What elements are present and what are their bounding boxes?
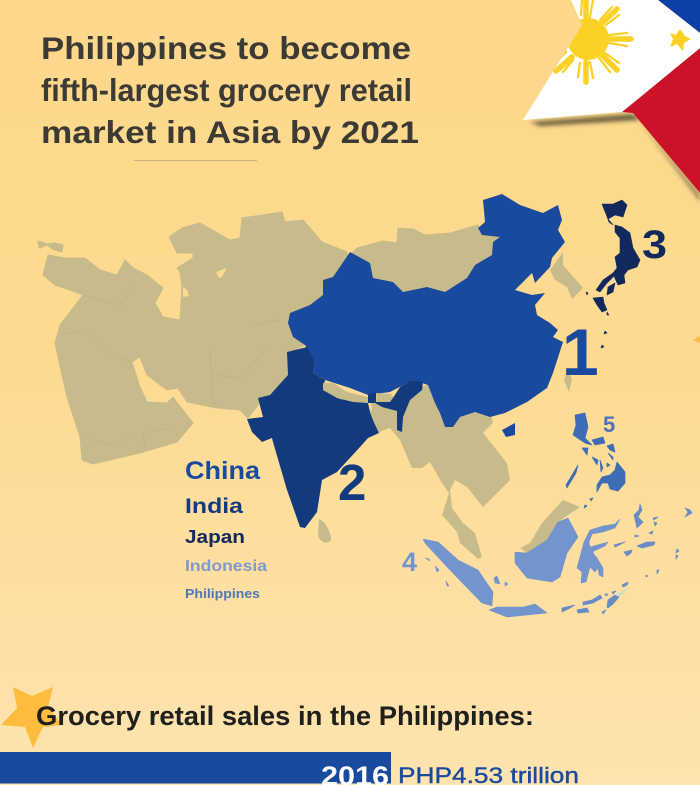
region: Caspian and Aral lakes xyxy=(183,268,227,297)
rank 1: 1 xyxy=(562,315,599,389)
region: Southeast Asia mainland xyxy=(370,380,510,559)
rank numbers xyxy=(338,223,667,577)
heading: grocery retail sales: Grocery retail sales in the Philippines: xyxy=(36,701,534,731)
region: Korea xyxy=(550,252,583,299)
bar: 2016 sales xyxy=(0,752,579,785)
rank 2: 2 xyxy=(338,454,366,511)
legend: country ranking: China xyxy=(185,457,261,485)
region: Philippines xyxy=(566,413,625,508)
region: Indonesia xyxy=(423,518,620,617)
region: West and Central Asia xyxy=(38,212,500,464)
region: China xyxy=(288,194,565,437)
map of Asia xyxy=(38,194,692,617)
legend: country ranking xyxy=(185,457,267,601)
rank 3: 3 xyxy=(642,223,667,267)
title xyxy=(41,30,419,150)
title: market in Asia by 2021 xyxy=(41,114,419,150)
region: Japan xyxy=(586,200,640,348)
legend: country ranking: Indonesia xyxy=(185,558,267,575)
title: fifth-largest grocery retail xyxy=(41,72,412,108)
region: Taiwan and Sri Lanka xyxy=(318,368,572,543)
icon: orange star fragment xyxy=(693,336,700,343)
rank 5: 5 xyxy=(603,412,615,437)
legend: country ranking: India xyxy=(185,495,243,518)
region: Bangladesh xyxy=(370,403,397,433)
legend: country ranking: Philippines xyxy=(185,587,260,601)
region: India xyxy=(247,347,423,528)
icon: yellow star xyxy=(1,687,62,748)
title: Philippines to become xyxy=(41,30,411,66)
region: Malaysian Borneo xyxy=(520,500,580,553)
region: Nepal and Bhutan xyxy=(323,383,392,403)
legend: country ranking: Japan xyxy=(185,527,245,547)
region: Eastern Indonesia islands xyxy=(562,504,692,614)
icon: Philippine flag corner xyxy=(523,0,700,202)
region: Timor-Leste xyxy=(615,587,630,597)
rank 4: 4 xyxy=(402,547,417,577)
